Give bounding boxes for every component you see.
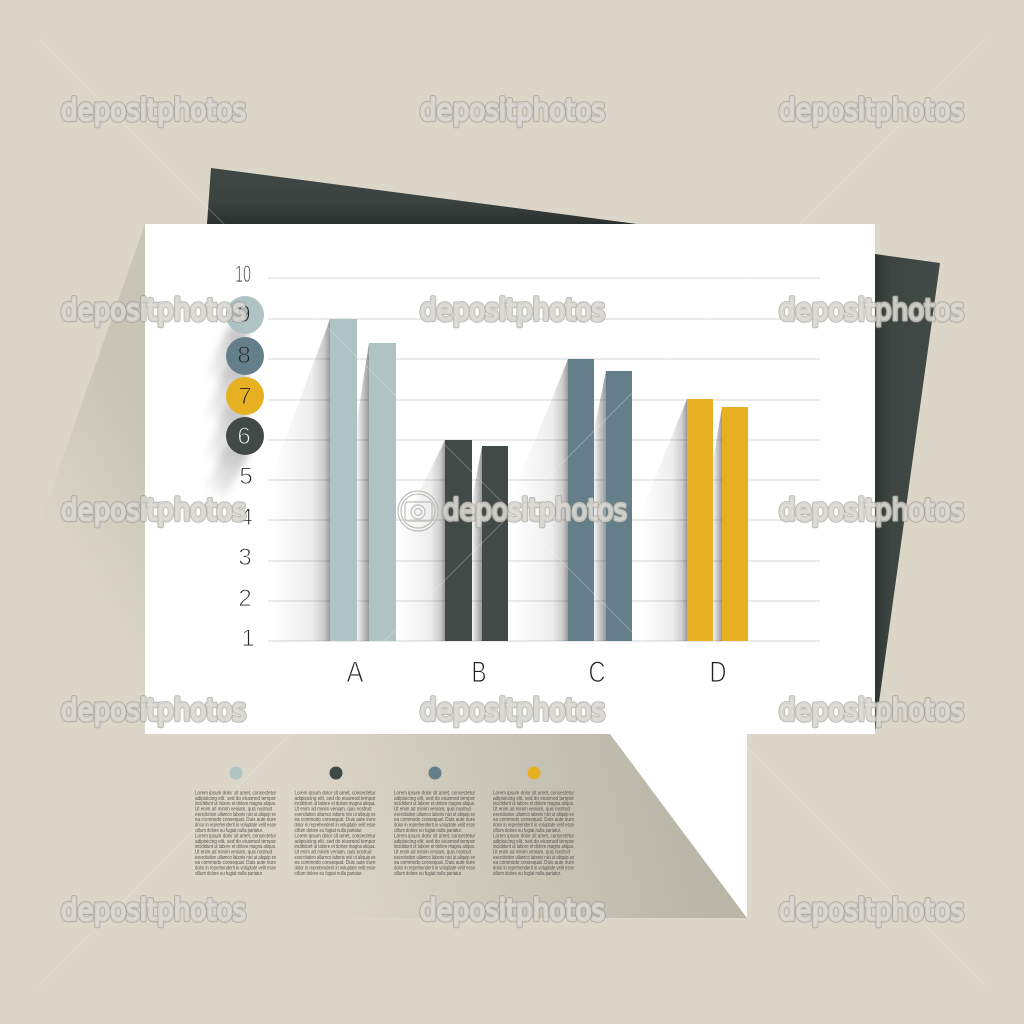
legend text column 4: cillum dolore eu fugiat nulla pariatur. [493, 871, 561, 877]
watermark text: depositphotos [443, 493, 627, 527]
y axis numbers: 10 [235, 261, 251, 288]
legend text column 3: adipisicing elit, sed do eiusmod tempor [394, 796, 475, 802]
y axis numbers: 6 [237, 423, 251, 450]
legend text column 1: cillum dolore eu fugiat nulla pariatur. [195, 871, 263, 877]
watermark text: depositphotos [61, 693, 246, 727]
category labels [346, 656, 726, 689]
legend text column 3: Ut enim ad minim veniam, quis nostrud [394, 806, 471, 812]
bubble cast shadow, tail [145, 734, 747, 918]
legend text column 1: exercitation ullamco laboris nisi ut aliquip ex [195, 855, 276, 861]
y axis numbers: 4 [239, 504, 253, 531]
legend text column 1: dolor in reprehenderit in voluptate velit esse [195, 866, 276, 872]
watermark text: depositphotos [420, 93, 605, 127]
legend text column 3: exercitation ullamco laboris nisi ut aliquip ex [394, 855, 475, 861]
watermark text: depositphotos [779, 493, 964, 527]
legend text column 4: incididunt ut labore et dolore magna aliqua. [493, 844, 574, 850]
legend text column 2: dolor in reprehenderit in voluptate velit esse [294, 866, 376, 872]
legend text column 2: ea commodo consequat. Duis aute irure [294, 860, 376, 866]
watermark text: depositphotos [61, 893, 246, 927]
legend text column 2: ea commodo consequat. Duis aute irure [294, 817, 376, 823]
watermark text: depositphotos [61, 93, 246, 127]
y axis numbers: 1 [241, 625, 255, 652]
bar shadows [270, 319, 722, 641]
legend text column 4: exercitation ullamco laboris nisi ut aliquip ex [493, 855, 574, 861]
legend text column 4: dolor in reprehenderit in voluptate velit esse [493, 822, 574, 828]
legend text column 1: ea commodo consequat. Duis aute irure [195, 817, 276, 823]
watermark text: depositphotos [779, 93, 964, 127]
legend text column 4: adipisicing elit, sed do eiusmod tempor [493, 839, 574, 845]
legend text column 4: adipisicing elit, sed do eiusmod tempor [493, 796, 574, 802]
bar B2 [482, 446, 508, 641]
legend text column 2: incididunt ut labore et dolore magna aliqua. [294, 801, 376, 807]
watermark text: depositphotos [420, 893, 605, 927]
legend text column 4: exercitation ullamco laboris nisi ut aliquip ex [493, 812, 574, 818]
legend text column 4: Ut enim ad minim veniam, quis nostrud [493, 806, 570, 812]
legend text column 3: adipisicing elit, sed do eiusmod tempor [394, 839, 475, 845]
legend text column 1: ea commodo consequat. Duis aute irure [195, 860, 276, 866]
legend dots [230, 766, 540, 780]
y axis numbers: 2 [238, 585, 252, 612]
legend text column 3: incididunt ut labore et dolore magna aliqua. [394, 844, 475, 850]
y axis numbers: 7 [238, 383, 252, 410]
bar C1 [568, 359, 594, 641]
watermark text: depositphotos [61, 893, 246, 927]
watermark text: depositphotos [420, 293, 605, 327]
legend text column 3: Ut enim ad minim veniam, quis nostrud [394, 850, 471, 856]
legend text column 1: Lorem ipsum dolor sit amet, consectetur [195, 834, 276, 840]
bar D2 [722, 407, 748, 641]
legend text column 3: Lorem ipsum dolor sit amet, consectetur [394, 834, 475, 840]
watermark text: depositphotos [61, 293, 246, 327]
y axis numbers: 8 [237, 342, 251, 369]
legend text column 1: Lorem ipsum dolor sit amet, consectetur [195, 790, 276, 796]
watermark text: depositphotos [61, 493, 246, 527]
legend text column 1: adipisicing elit, sed do eiusmod tempor [195, 839, 276, 845]
y axis numbers: 3 [238, 544, 252, 571]
bar B1 [445, 440, 472, 641]
legend text column 2: incididunt ut labore et dolore magna aliqua. [294, 844, 376, 850]
legend text column 3: ea commodo consequat. Duis aute irure [394, 817, 475, 823]
watermark text: depositphotos [779, 693, 964, 727]
legend text column 1: exercitation ullamco laboris nisi ut aliquip ex [195, 812, 276, 818]
watermark text: depositphotos [420, 693, 605, 727]
watermark text: depositphotos [420, 293, 605, 327]
icon: watermark camera [398, 491, 438, 531]
legend text column 2: Lorem ipsum dolor sit amet, consectetur [294, 790, 376, 796]
watermark text: depositphotos [779, 893, 964, 927]
chart grid lines [268, 278, 820, 641]
legend text column 4: incididunt ut labore et dolore magna aliqua. [493, 801, 574, 807]
legend text column 1: cillum dolore eu fugiat nulla pariatur. [195, 828, 263, 834]
watermark text: depositphotos [779, 693, 964, 727]
legend text column 3: dolor in reprehenderit in voluptate velit esse [394, 822, 475, 828]
watermark text: depositphotos [420, 693, 605, 727]
legend text column 1: adipisicing elit, sed do eiusmod tempor [195, 796, 276, 802]
legend text column 1: Ut enim ad minim veniam, quis nostrud [195, 806, 272, 812]
legend circles [226, 296, 264, 455]
legend text column 2: Ut enim ad minim veniam, quis nostrud [294, 850, 372, 856]
legend text column 3: Lorem ipsum dolor sit amet, consectetur [394, 790, 475, 796]
watermark text: depositphotos [779, 293, 964, 327]
legend text column 1: dolor in reprehenderit in voluptate velit esse [195, 822, 276, 828]
legend text column 2: Ut enim ad minim veniam, quis nostrud [294, 806, 372, 812]
category labels: B [472, 656, 486, 689]
category labels: D [710, 656, 726, 689]
watermark text: depositphotos [779, 93, 964, 127]
watermark text [61, 93, 964, 927]
legend text column 4: Ut enim ad minim veniam, quis nostrud [493, 850, 570, 856]
legend text column 3: cillum dolore eu fugiat nulla pariatur. [394, 828, 462, 834]
watermark text: depositphotos [420, 93, 605, 127]
legend text column 4: ea commodo consequat. Duis aute irure [493, 860, 574, 866]
watermark text: depositphotos [420, 893, 605, 927]
bar C2 [606, 371, 632, 641]
y axis numbers: 5 [239, 463, 253, 490]
watermark text: depositphotos [779, 293, 964, 327]
watermark text: depositphotos [443, 493, 627, 527]
legend text column 3: ea commodo consequat. Duis aute irure [394, 860, 475, 866]
watermark text: depositphotos [61, 493, 246, 527]
legend text column 1: incididunt ut labore et dolore magna aliqua. [195, 844, 276, 850]
watermark text: depositphotos [779, 493, 964, 527]
legend text column 4: Lorem ipsum dolor sit amet, consectetur [493, 790, 574, 796]
legend text column 3: dolor in reprehenderit in voluptate velit esse [394, 866, 475, 872]
circle shadows [205, 325, 250, 497]
bar chart bars [330, 319, 748, 641]
category labels: A [346, 656, 364, 689]
y axis numbers [235, 261, 255, 652]
speech bubble panel [145, 224, 875, 918]
legend text column 2: adipisicing elit, sed do eiusmod tempor [294, 839, 376, 845]
watermark text: depositphotos [61, 293, 246, 327]
back dark paper [207, 168, 940, 731]
legend text column 2: exercitation ullamco laboris nisi ut aliquip ex [294, 855, 376, 861]
legend text column 4: dolor in reprehenderit in voluptate velit esse [493, 866, 574, 872]
watermark text: depositphotos [61, 93, 246, 127]
legend text column 2: dolor in reprehenderit in voluptate velit esse [294, 822, 376, 828]
legend text column 1: incididunt ut labore et dolore magna aliqua. [195, 801, 276, 807]
legend text column 2: Lorem ipsum dolor sit amet, consectetur [294, 834, 376, 840]
legend text column 3: cillum dolore eu fugiat nulla pariatur. [394, 871, 462, 877]
category labels: C [588, 656, 606, 689]
legend text column 1: Ut enim ad minim veniam, quis nostrud [195, 850, 272, 856]
legend text column 4: Lorem ipsum dolor sit amet, consectetur [493, 834, 574, 840]
bubble cast shadow, left [18, 224, 145, 734]
legend text column 2: cillum dolore eu fugiat nulla pariatur. [294, 828, 362, 834]
legend text column 2: exercitation ullamco laboris nisi ut aliquip ex [294, 812, 376, 818]
bar A1 [330, 319, 357, 641]
y axis numbers: 9 [237, 301, 251, 328]
watermark text: depositphotos [61, 693, 246, 727]
watermark text: depositphotos [779, 893, 964, 927]
bar A2 [369, 343, 396, 641]
legend text column 4: ea commodo consequat. Duis aute irure [493, 817, 574, 823]
legend text column 3: exercitation ullamco laboris nisi ut aliquip ex [394, 812, 475, 818]
legend text column 4: cillum dolore eu fugiat nulla pariatur. [493, 828, 561, 834]
legend text column 3: incididunt ut labore et dolore magna aliqua. [394, 801, 475, 807]
legend text column 2: cillum dolore eu fugiat nulla pariatur. [294, 871, 362, 877]
legend text column 2: adipisicing elit, sed do eiusmod tempor [294, 796, 376, 802]
bar D1 [687, 399, 713, 641]
